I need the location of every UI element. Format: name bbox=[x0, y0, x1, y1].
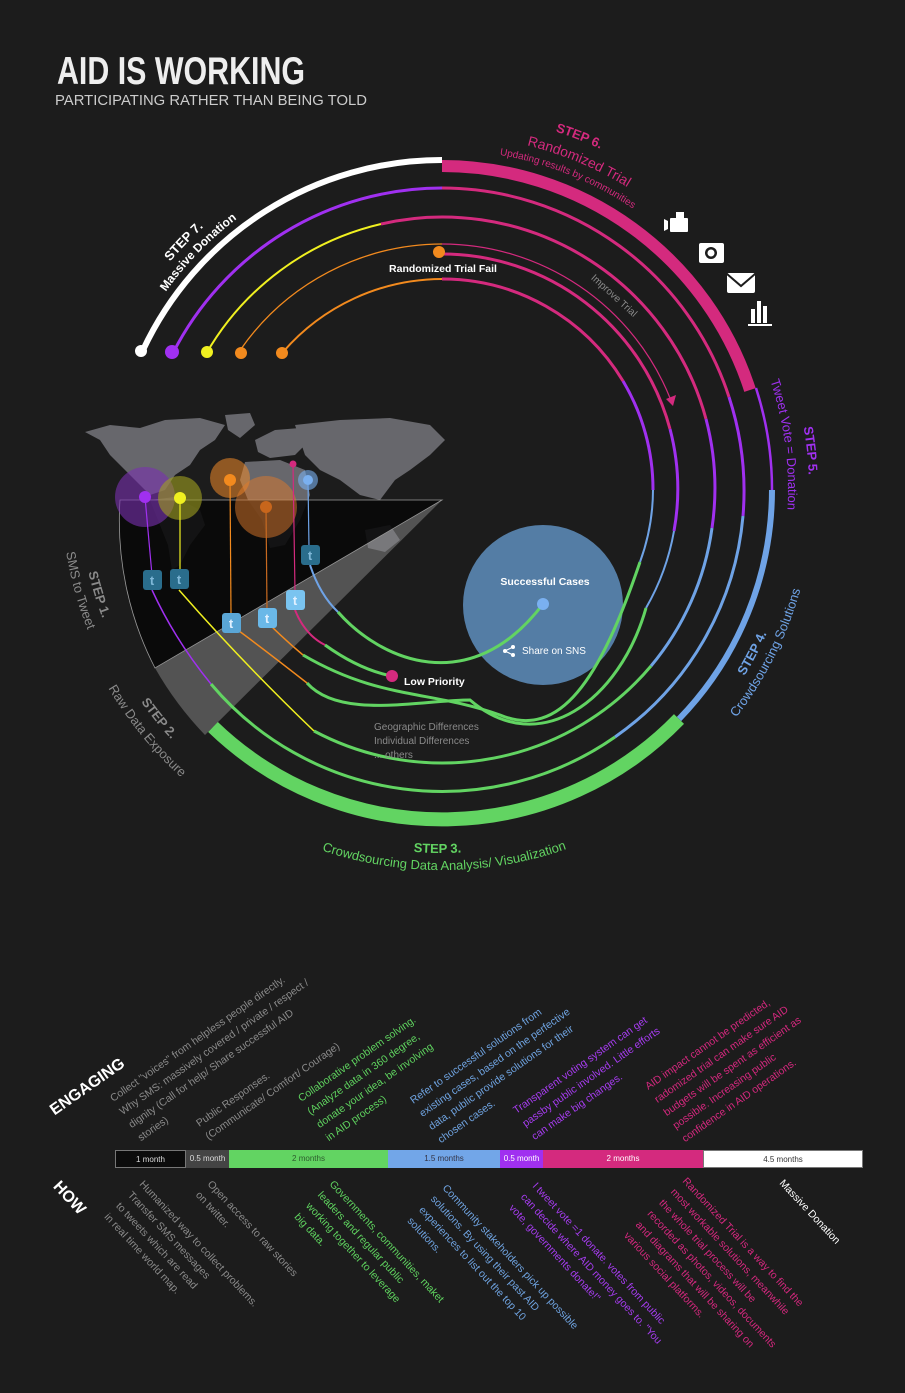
engaging heading: ENGAGING bbox=[47, 1055, 128, 1119]
twitter icons: t bbox=[265, 611, 270, 626]
successful cases circle: Share on SNS bbox=[522, 646, 586, 657]
randomized trial fail label: Randomized Trial Fail bbox=[389, 263, 497, 275]
successful cases circle: Successful Cases bbox=[500, 576, 590, 588]
low priority path: Low Priority bbox=[404, 676, 465, 688]
engaging text 5: Transparent voting system can get passby public involved. Little efforts can make big changes. bbox=[511, 1014, 662, 1143]
step 7 label: Massive Donation bbox=[160, 214, 236, 292]
title: AID IS WORKING bbox=[57, 50, 305, 93]
step 6 label bbox=[500, 124, 635, 208]
step 1 black sector bbox=[119, 500, 442, 668]
outer ring bbox=[135, 160, 772, 819]
how text 7: Massive Donation bbox=[777, 1177, 842, 1247]
how text 1: Humanized way to collect problems. Transfer SMS messages to tweets which are read in real time world map. bbox=[102, 1178, 260, 1309]
step 1 label: SMS to Tweet bbox=[66, 552, 95, 630]
step 3 label: STEP 3. bbox=[414, 843, 460, 853]
step 6 label: Randomized Trial bbox=[528, 136, 632, 187]
step 3 label: Crowdsourcing Data Analysis/ Visualization bbox=[324, 843, 566, 872]
timeline bar: 2 months bbox=[607, 1154, 639, 1163]
engaging text 2: Public Responses. (Communicate/ Comfort/ Courage) bbox=[194, 1040, 342, 1143]
step 7 label: STEP 7. bbox=[164, 223, 203, 260]
ring 4 with randomized trial fail bbox=[224, 244, 678, 724]
engaging text 3: Collaborative problem solving. (Analyze data in 360 degree, donate your idea, be involving in AID process) bbox=[296, 1014, 436, 1144]
differences text bbox=[374, 722, 479, 761]
step 6 label: Updating results by communities bbox=[500, 148, 635, 208]
differences text: Individual Differences bbox=[374, 736, 469, 747]
how heading: HOW bbox=[50, 1178, 89, 1218]
step 5 label bbox=[771, 378, 818, 510]
success path bbox=[303, 475, 549, 663]
ring 5 bbox=[260, 279, 653, 721]
timeline bar: 4.5 months bbox=[763, 1155, 803, 1164]
twitter icons: t bbox=[308, 548, 313, 563]
step 4 label: STEP 4. bbox=[738, 633, 766, 675]
step 1 label bbox=[66, 552, 109, 630]
timeline bar: 2 months bbox=[292, 1154, 325, 1163]
improve trial label: Improve Trial bbox=[589, 273, 639, 320]
step 5 label: Tweet Vote = Donation bbox=[771, 378, 798, 510]
step 2 label: STEP 2. bbox=[142, 698, 174, 738]
step 4 label: Crowdsourcing Solutions bbox=[731, 588, 800, 716]
ring 2 bbox=[139, 188, 744, 791]
twitter icons: t bbox=[293, 593, 298, 608]
how text 2: Open access to raw stories on twitter. bbox=[193, 1178, 300, 1279]
how text 4: Community stakeholders pick up possible solutions. By using their past AID experiences to list out the top 10 solutions. bbox=[405, 1182, 580, 1332]
ring 3 bbox=[174, 217, 715, 763]
twitter icons: t bbox=[229, 616, 234, 631]
low priority path bbox=[290, 460, 465, 688]
timeline bar: 0.5 month bbox=[504, 1154, 539, 1163]
how text 6: Randomized Trial is a way to find the most workable solutions, meanwhile the whole trial process will be recorded as photos, videos, documents and diagrams that will be sharing on various social platforms. bbox=[621, 1175, 806, 1350]
twitter icons: t bbox=[150, 573, 155, 588]
icons: video, camera, mail, chart bbox=[664, 212, 772, 326]
how text 3: Governments, communities, maket leaders and regular public working together to leverage big data. bbox=[292, 1178, 446, 1305]
timeline bar: 1 month bbox=[136, 1155, 165, 1164]
randomized trial fail label bbox=[389, 246, 497, 275]
differences text: ... others bbox=[374, 750, 413, 761]
map location circles bbox=[115, 458, 318, 538]
step 5 label: STEP 5. bbox=[804, 426, 818, 474]
step 2 label: Raw Data Exposure bbox=[108, 684, 184, 776]
how text 5: I tweet vote =1 donate. votes from public can decide where AID money goes to. "You vote, governments donate!" bbox=[506, 1180, 667, 1347]
engaging text 1: Collect "voices" from helpless people directly. Why SMS: massively covered / private / respect / dignity (Call for help/ Share successful AID stories) bbox=[108, 974, 311, 1144]
step 2 gray band bbox=[155, 500, 442, 735]
successful cases circle bbox=[463, 525, 623, 685]
step 1 label: STEP 1. bbox=[89, 571, 109, 618]
differences text: Geographic Differences bbox=[374, 722, 479, 733]
main diagram bbox=[55, 50, 818, 872]
title: PARTICIPATING RATHER THAN BEING TOLD bbox=[55, 92, 367, 109]
engaging text 6: AID impact cannot be predicted, radomized trial can make sure AID budgets will be spent as efficient as possible. Increasing public confidence in AID operations. bbox=[643, 997, 804, 1145]
twitter icons: t bbox=[177, 572, 182, 587]
timeline bar: 0.5 month bbox=[190, 1154, 225, 1163]
twitter icons bbox=[143, 545, 320, 633]
engaging text 4: Refer to successful solutions from existing cases, based on the perfective data, public provide solutions for their chosen cases. bbox=[408, 1006, 576, 1146]
step 6 label: STEP 6. bbox=[556, 124, 600, 148]
world map bbox=[85, 413, 445, 570]
timeline bar: 1.5 months bbox=[424, 1154, 464, 1163]
